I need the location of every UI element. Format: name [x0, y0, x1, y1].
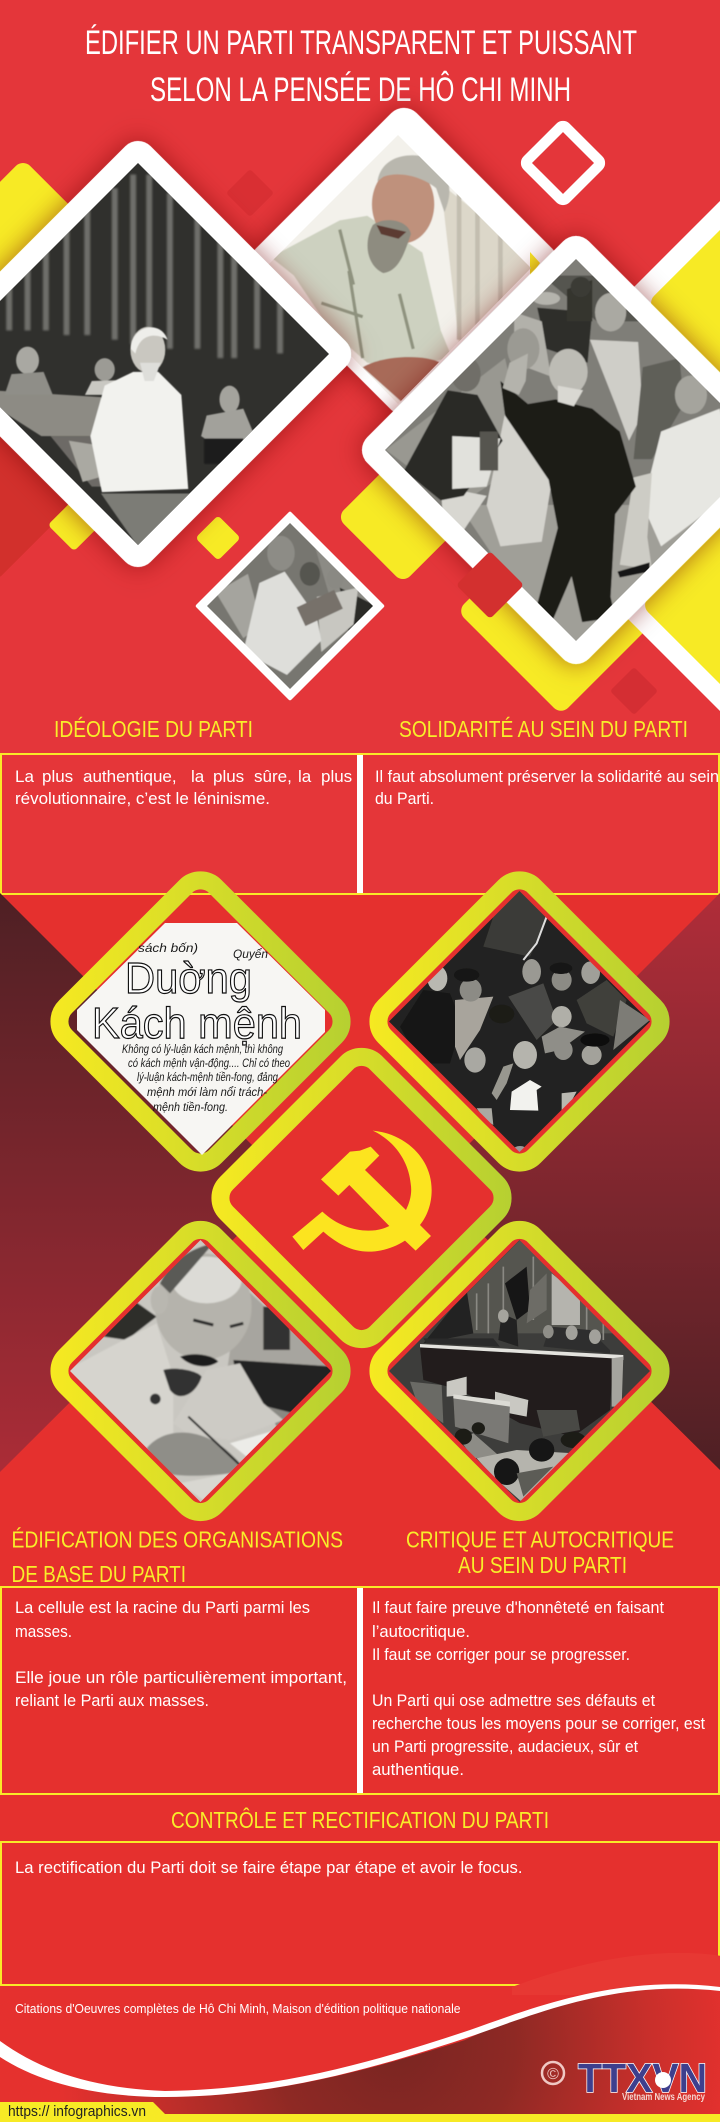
panel: idéologie and solidarité: du Parti. [375, 789, 434, 808]
photo diamond: group reading with Hô Chi Minh [370, 872, 669, 1171]
panel: édification and critique [1, 1587, 719, 1794]
dark red accent diamond [456, 551, 524, 619]
text: critique [372, 1598, 705, 1779]
title [85, 24, 637, 109]
text: critique: Il faut se corriger pour se progresser. [372, 1645, 630, 1664]
heading: édification des organisations [12, 1526, 343, 1587]
text: édification: reliant le Parti aux masses. [15, 1691, 209, 1710]
text: idéologie: la [191, 767, 205, 786]
photo diamond: Đường Kách mệnh book: Không có lý-luận kách mệnh, thì không [122, 1042, 283, 1056]
logo: TTXVN Vietnam News Agency: © [547, 2066, 559, 2083]
dark triangles [0, 893, 720, 1472]
text: idéologie: plus [42, 767, 73, 786]
heading: contrôle et rectification: CONTRÔLE ET RECTIFICATION DU PARTI [171, 1806, 549, 1833]
text: critique: recherche tous les moyens pour se corriger, est [372, 1714, 705, 1733]
text: idéologie: La [15, 767, 34, 786]
photo diamond: Đường Kách mệnh book: Kách mệnh [92, 999, 302, 1048]
photo diamond: Đường Kách mệnh book: Quyển [233, 947, 268, 961]
party emblem diamond with hammer and sickle [212, 1048, 511, 1348]
photo: portrait of Hô Chi Minh [243, 100, 565, 423]
decorative diamonds behind photos [0, 159, 720, 728]
text: édification: La cellule est la racine du Parti parmi les [15, 1598, 310, 1617]
text: critique: Il faut faire preuve d'honnêteté en faisant [372, 1598, 664, 1617]
icon: hammer and sickle [292, 1131, 432, 1252]
photo: Hô Chi Minh applauded [195, 511, 385, 701]
photo diamond: Đường Kách mệnh book: mệnh tiền-fong. [153, 1100, 228, 1114]
photo diamond: Hô Chi Minh writing [51, 1221, 350, 1521]
text: idéologie: plus [213, 767, 244, 786]
heading: critique et autocritique: AU SEIN DU PARTI [458, 1552, 627, 1578]
logo: TTXVN Vietnam News Agency: TTXVN [578, 2055, 707, 2101]
footer wave [0, 1953, 720, 2122]
photo: Hô Chi Minh walking with a crowd [355, 229, 720, 671]
panel: idéologie and solidarité: révolutionnaire, c’est le léninisme. [15, 789, 270, 808]
panel: idéologie and solidarité [1, 754, 719, 894]
yellow website strip [0, 2102, 720, 2122]
photo diamond: Đường Kách mệnh book: Duờng [125, 954, 252, 1003]
photo diamond: party congress [370, 1221, 669, 1521]
text: idéologie: plus [321, 767, 352, 786]
photo diamond: Đường Kách mệnh book [51, 872, 350, 1171]
text: idéologie: authentique, [83, 767, 177, 786]
heading: idéologie du parti: IDÉOLOGIE DU PARTI [54, 716, 253, 742]
outlined white diamond [525, 125, 601, 201]
heading: critique et autocritique [406, 1526, 674, 1578]
text: édification [15, 1598, 347, 1710]
heading: édification des organisations: DE BASE DU PARTI [12, 1561, 186, 1587]
text: édification: Elle joue un rôle particulièrement important, [15, 1668, 347, 1687]
text: idéologie: la [298, 767, 312, 786]
text: édification: masses. [15, 1622, 72, 1641]
text: critique: authentique. [372, 1760, 464, 1779]
text: rectification: La rectification du Parti doit se faire étape par étape et avoir le focus. [15, 1858, 522, 1877]
photo diamond: Đường Kách mệnh book: sách bốn) [138, 941, 198, 955]
heading: édification des organisations: ÉDIFICATION DES ORGANISATIONS [12, 1526, 343, 1552]
yellow website strip: https:// infographics.vn [8, 2103, 146, 2120]
text: idéologie: sûre, [254, 767, 292, 786]
photo diamond: Đường Kách mệnh book: có kách mệnh vận-động.... Chỉ có theo [128, 1056, 290, 1070]
text: critique: l’autocritique. [372, 1622, 470, 1641]
text: critique: un Parti progressite, audacieux, sûr et [372, 1737, 638, 1756]
photo diamond: Đường Kách mệnh book: mệnh mới làm nổi trách- [147, 1085, 267, 1099]
photo diamond: Đường Kách mệnh book: lý-luận kách-mệnh tiền-fong, đảng [137, 1070, 278, 1084]
photo: Hô Chi Minh speaking at the rostrum [0, 134, 358, 574]
text: critique: Un Parti qui ose admettre ses défauts et [372, 1691, 655, 1710]
source citation: Citations d'Oeuvres complètes de Hô Chi Minh, Maison d'édition politique nationale [15, 2001, 460, 2016]
panel: contrôle et rectification [1, 1842, 719, 1985]
